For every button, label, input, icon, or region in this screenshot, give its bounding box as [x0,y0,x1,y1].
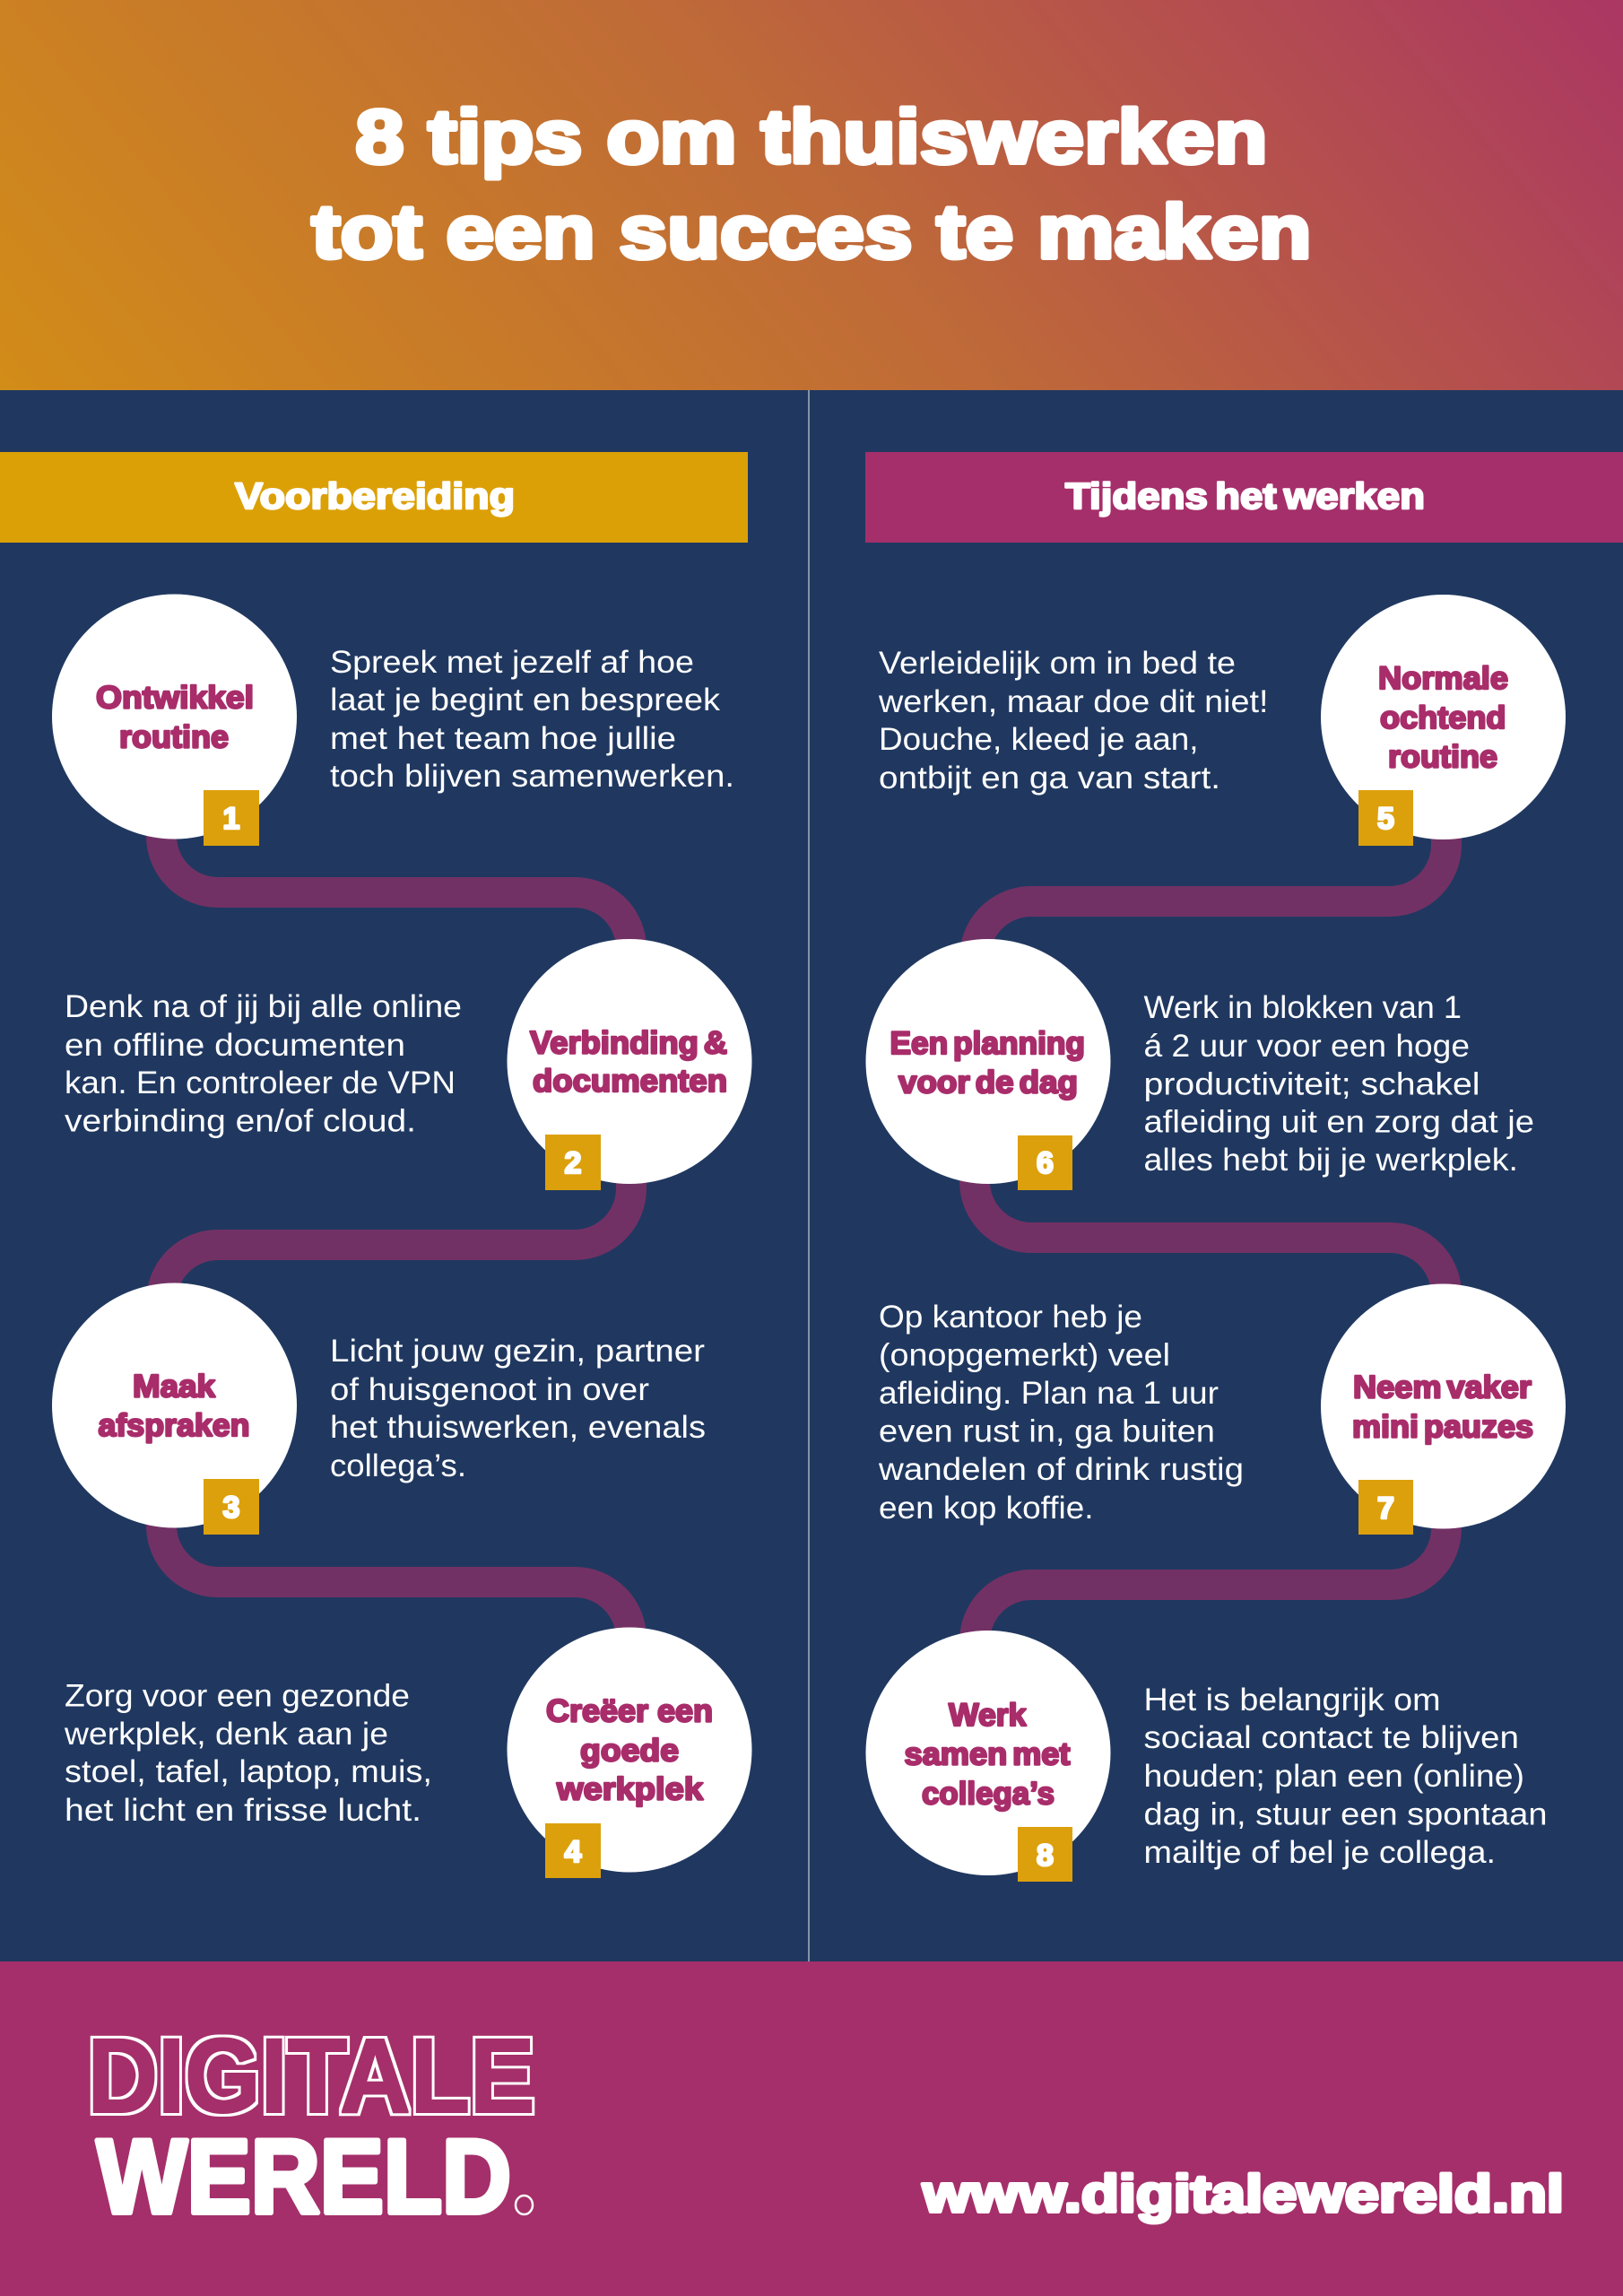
tip 6 text: afleiding uit en zorg dat je [1144,1105,1534,1139]
tip 2 text: en offline documenten [65,1028,405,1063]
logo: Digitale Wereld: DIGITALE [88,2017,534,2135]
website url: www.digitalewereld.nl [922,2165,1564,2223]
tip 8 text [1144,1683,1548,1870]
section header: Tijdens het werken [865,452,1623,543]
tip 3 circle: afspraken [99,1408,249,1443]
tip 1 circle: Ontwikkel [96,680,254,716]
tip 7 text: (onopgemerkt) veel [879,1338,1170,1372]
tip 7 text: even rust in, ga buiten [879,1413,1215,1449]
tip 6 text: Werk in blokken van 1 [1144,990,1462,1025]
tip 3 circle [52,1283,297,1535]
tip 6 circle [866,939,1110,1190]
tip 8 circle [866,1631,1110,1882]
tip 7 circle [1321,1284,1566,1535]
tip 5 text: Verleidelijk om in bed te [879,646,1236,681]
tip 8 text: Het is belangrijk om [1144,1683,1440,1718]
tip 4 circle [508,1627,751,1878]
connector 7 to 8 [975,1489,1446,1668]
tip 3 circle: 3 [223,1491,239,1525]
tip 4 text: Zorg voor een gezonde [65,1679,410,1713]
connector 1 to 2 [161,807,631,987]
tip 1 text [330,645,734,794]
title [312,95,1311,274]
tip 7 text: Op kantoor heb je [879,1300,1142,1335]
tip 2 circle: documenten [533,1064,727,1099]
tip 3 text: collega’s. [330,1448,466,1483]
tip 5 circle: routine [1388,739,1497,775]
tip 4 circle: 4 [565,1835,582,1869]
tip 3 text: het thuiswerken, evenals [330,1410,706,1445]
tip 8 circle: 8 [1037,1839,1054,1873]
tip 1 text: toch blijven samenwerken. [330,759,734,794]
tip 4 text: stoel, tafel, laptop, muis, [65,1754,432,1789]
tip 3 text: of huisgenoot in over [330,1372,649,1407]
tip 5 circle: Normale [1378,661,1508,696]
tip 4 text: werkplek, denk aan je [64,1717,388,1752]
tip 7 text: afleiding. Plan na 1 uur [879,1376,1219,1411]
tip 7 text [878,1300,1244,1526]
tip 8 circle: Werk [949,1698,1027,1733]
tip 1 text: laat je begint en bespreek [330,683,721,718]
section header: Tijdens het werken: Tijdens het werken [1065,475,1425,517]
tip 1 circle [52,594,297,846]
title: 8 tips om thuiswerken [355,95,1268,179]
tip 3 text [330,1334,706,1483]
logo: Digitale Wereld [88,2017,534,2235]
section header: Voorbereiding [0,452,748,543]
tip 7 circle: mini pauzes [1352,1410,1533,1444]
connector 2 to 3 [161,1148,631,1327]
logo: Digitale Wereld: WERELD [97,2118,511,2235]
tip 7 circle: 7 [1377,1492,1394,1526]
tip 2 text [65,989,462,1139]
tip 2 circle [508,939,751,1190]
tip 5 text [878,646,1268,796]
tip 4 text: het licht en frisse lucht. [65,1793,421,1828]
tip 4 text [64,1679,432,1828]
connector 3 to 4 [161,1480,631,1668]
tip 2 text: kan. En controleer de VPN [65,1065,456,1100]
tip 6 circle: Een planning [890,1026,1085,1061]
tip 5 circle: ochtend [1380,700,1506,735]
tip 1 circle: 1 [223,802,239,836]
tip 2 text: verbinding en/of cloud. [65,1103,416,1139]
tip 6 text: á 2 uur voor een hoge [1144,1029,1470,1064]
connector 6 to 7 [975,1148,1446,1327]
connector 5 to 6 [975,807,1446,987]
tip 8 text: houden; plan een (online) [1144,1759,1524,1794]
tip 5 circle: 5 [1377,802,1394,836]
tip 7 text: een kop koffie. [879,1491,1094,1526]
tip 6 circle: voor de dag [898,1065,1078,1100]
tip 5 text: werken, maar doe dit niet! [878,684,1268,719]
tip 3 circle: Maak [133,1369,216,1405]
tip 5 text: ontbijt en ga van start. [879,761,1220,796]
tip 5 circle [1321,595,1566,846]
section header: Voorbereiding: Voorbereiding [235,475,515,517]
tip 3 text: Licht jouw gezin, partner [330,1334,705,1369]
tip 8 text: mailtje of bel je collega. [1144,1835,1496,1870]
tip 4 circle: goede [580,1733,679,1769]
tip 8 circle: samen met [904,1736,1071,1772]
tip 1 circle: routine [119,719,229,755]
tip 6 text: productiviteit; schakel [1144,1067,1480,1101]
tip 7 text: wandelen of drink rustig [878,1452,1244,1487]
tip 7 circle: Neem vaker [1353,1370,1532,1405]
tip 8 text: dag in, stuur een spontaan [1144,1797,1548,1831]
tip 8 circle: collega’s [922,1776,1055,1812]
tip 2 circle: 2 [565,1146,581,1180]
tip 1 text: Spreek met jezelf af hoe [330,645,694,680]
tip 1 text: met het team hoe jullie [330,721,676,756]
header panel [0,0,1623,390]
tip 2 circle: Verbinding & [530,1026,727,1060]
tip 6 circle: 6 [1037,1146,1054,1180]
tip 8 text: sociaal contact te blijven [1144,1720,1519,1755]
tip 2 text: Denk na of jij bij alle online [65,989,462,1024]
tip 6 text: alles hebt bij je werkplek. [1144,1143,1518,1178]
tip 5 text: Douche, kleed je aan, [879,722,1198,757]
title: tot een succes te maken [312,190,1311,274]
tip 6 text [1144,990,1534,1178]
footer panel [0,1961,1623,2296]
tip 4 circle: Creëer een [546,1693,713,1729]
tip 4 circle: werkplek [556,1772,704,1806]
